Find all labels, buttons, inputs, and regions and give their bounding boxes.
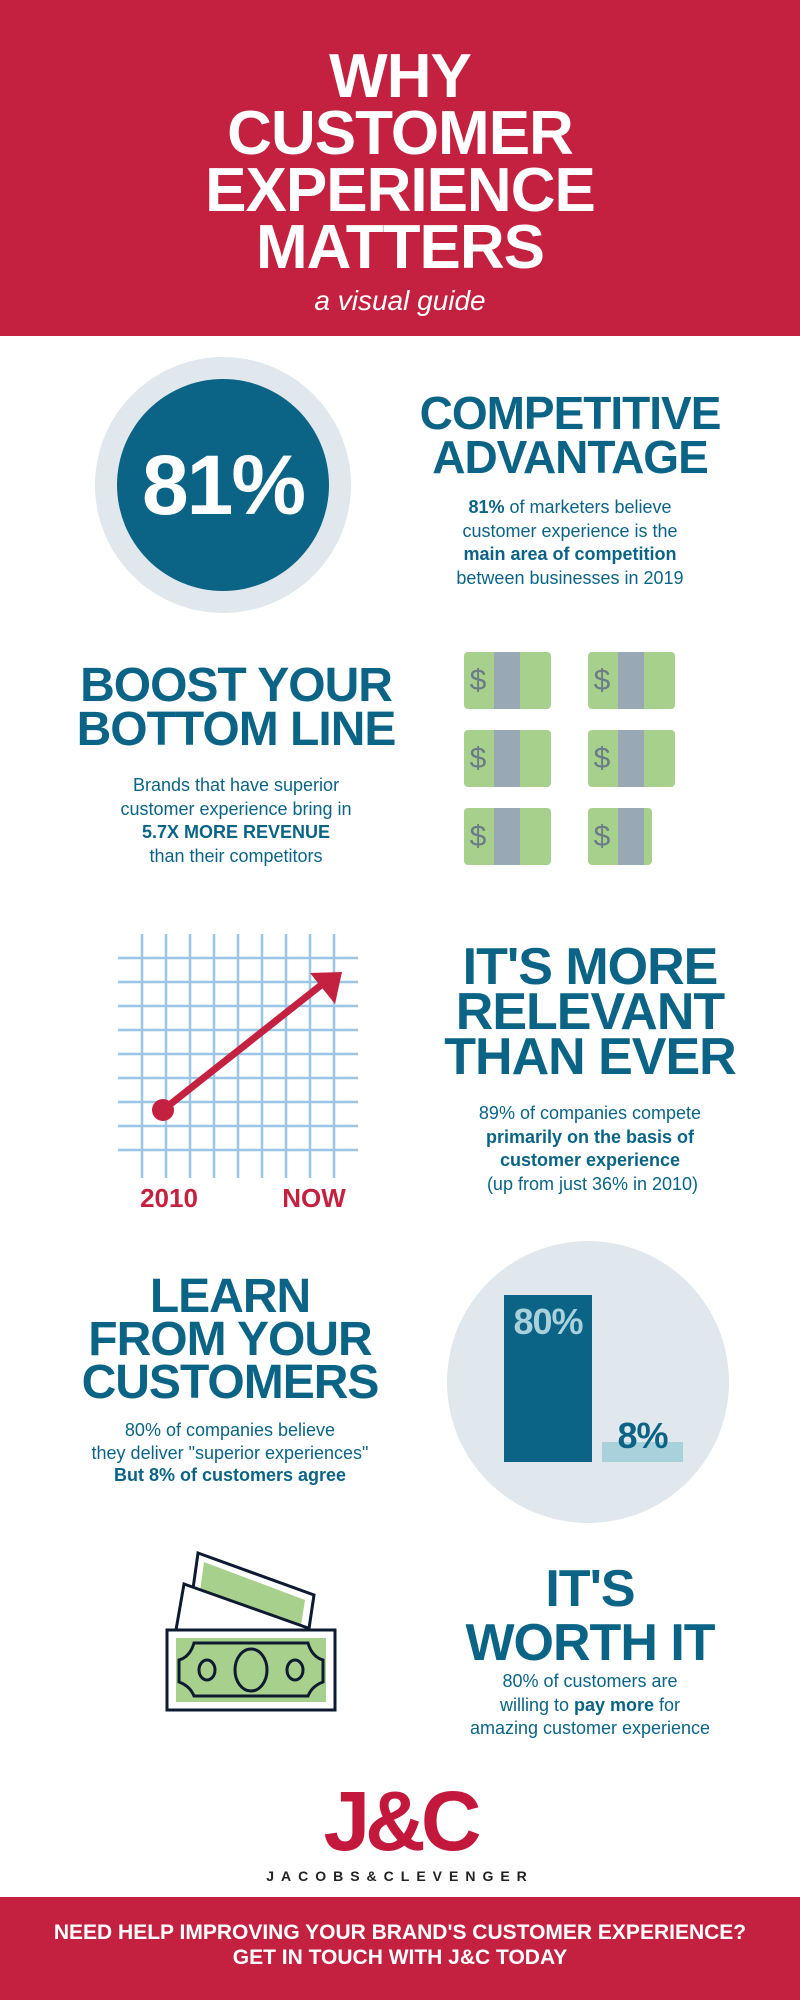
text: competitive advantage: main area of competition	[463, 544, 677, 564]
title: MATTERS	[256, 213, 544, 282]
bar 8%	[602, 1442, 683, 1462]
heading: worth it: WORTH IT	[465, 1614, 715, 1672]
text: learn: But 8% of customers agree	[114, 1465, 346, 1485]
heading: worth it: IT'S	[545, 1560, 635, 1618]
bar 80%	[504, 1295, 592, 1462]
text: competitive advantage	[456, 497, 684, 588]
heading: more relevant: THAN EVER	[444, 1028, 736, 1086]
heading: more relevant	[444, 938, 736, 1086]
heading: more relevant: IT'S MORE	[463, 938, 717, 996]
text: boost: Brands that have superior	[133, 775, 339, 795]
heading: boost your bottom line: BOOST YOUR	[80, 659, 392, 712]
footer banner: NEED HELP IMPROVING YOUR BRAND'S CUSTOMER EXPERIENCE?	[54, 1921, 746, 1944]
heading: more relevant: RELEVANT	[456, 983, 724, 1041]
subtitle: a visual guide	[314, 285, 486, 316]
bar 80%: 80%	[513, 1301, 583, 1342]
text: competitive advantage: 81% of marketers believe	[468, 497, 672, 517]
title	[205, 42, 595, 282]
chart: 80 vs 8 bars in circle	[447, 1241, 729, 1523]
header banner	[0, 0, 800, 336]
text: learn	[92, 1420, 368, 1485]
chart: growth graph	[118, 934, 358, 1213]
title: WHY	[329, 42, 471, 111]
text: worth it	[470, 1671, 710, 1738]
text: boost	[120, 775, 352, 866]
heading: worth it	[465, 1560, 715, 1672]
text: more relevant: primarily on the basis of	[486, 1126, 694, 1146]
heading: learn from customers	[82, 1270, 378, 1409]
text: worth it: willing to pay more for	[500, 1694, 680, 1714]
icon: money stack	[166, 1551, 336, 1712]
title: EXPERIENCE	[205, 156, 595, 225]
arrow	[152, 972, 342, 1121]
text: worth it: 80% of customers are	[502, 1671, 678, 1691]
stat circle 81%	[95, 357, 351, 613]
logo: J&C	[323, 1774, 477, 1868]
icon: money bills grid: $	[594, 820, 611, 853]
text: boost: than their competitors	[149, 846, 323, 866]
heading: boost your bottom line: BOTTOM LINE	[77, 703, 395, 756]
footer banner	[0, 1897, 800, 2000]
chart: growth graph: NOW	[282, 1183, 346, 1213]
heading: learn from customers: CUSTOMERS	[82, 1356, 378, 1409]
heading: learn from customers: LEARN	[150, 1270, 310, 1323]
chart: 80 vs 8 bars in circle: 8%	[617, 1415, 668, 1456]
icon: money bills grid: $	[470, 664, 487, 697]
heading: competitive advantage: COMPETITIVE	[420, 387, 720, 439]
heading: competitive advantage	[420, 387, 720, 483]
text: more relevant	[479, 1103, 701, 1194]
logo	[266, 1774, 534, 1884]
title: CUSTOMER	[227, 99, 573, 168]
text: worth it: amazing customer experience	[470, 1718, 710, 1738]
text: learn: they deliver "superior experiences"	[92, 1442, 368, 1462]
text: more relevant: 89% of companies compete	[479, 1103, 701, 1123]
text: more relevant: (up from just 36% in 2010)	[487, 1174, 698, 1194]
text: learn: 80% of companies believe	[125, 1420, 335, 1440]
footer banner: GET IN TOUCH WITH J&C TODAY	[233, 1946, 567, 1969]
text: competitive advantage: between businesses in 2019	[456, 568, 684, 588]
text: boost: 5.7X MORE REVENUE	[142, 822, 330, 842]
heading: learn from customers: FROM YOUR	[88, 1313, 372, 1366]
heading: boost your bottom line	[77, 659, 395, 756]
text: competitive advantage: customer experience is the	[462, 520, 678, 540]
chart: growth graph: 2010	[140, 1183, 198, 1213]
stat circle 81%: 81%	[142, 438, 304, 532]
icon: money bills grid	[464, 652, 675, 865]
text: boost: customer experience bring in	[120, 798, 352, 818]
text: more relevant: customer experience	[500, 1150, 680, 1170]
heading: competitive advantage: ADVANTAGE	[432, 431, 708, 483]
logo: JACOBS&CLEVENGER	[266, 1868, 534, 1884]
